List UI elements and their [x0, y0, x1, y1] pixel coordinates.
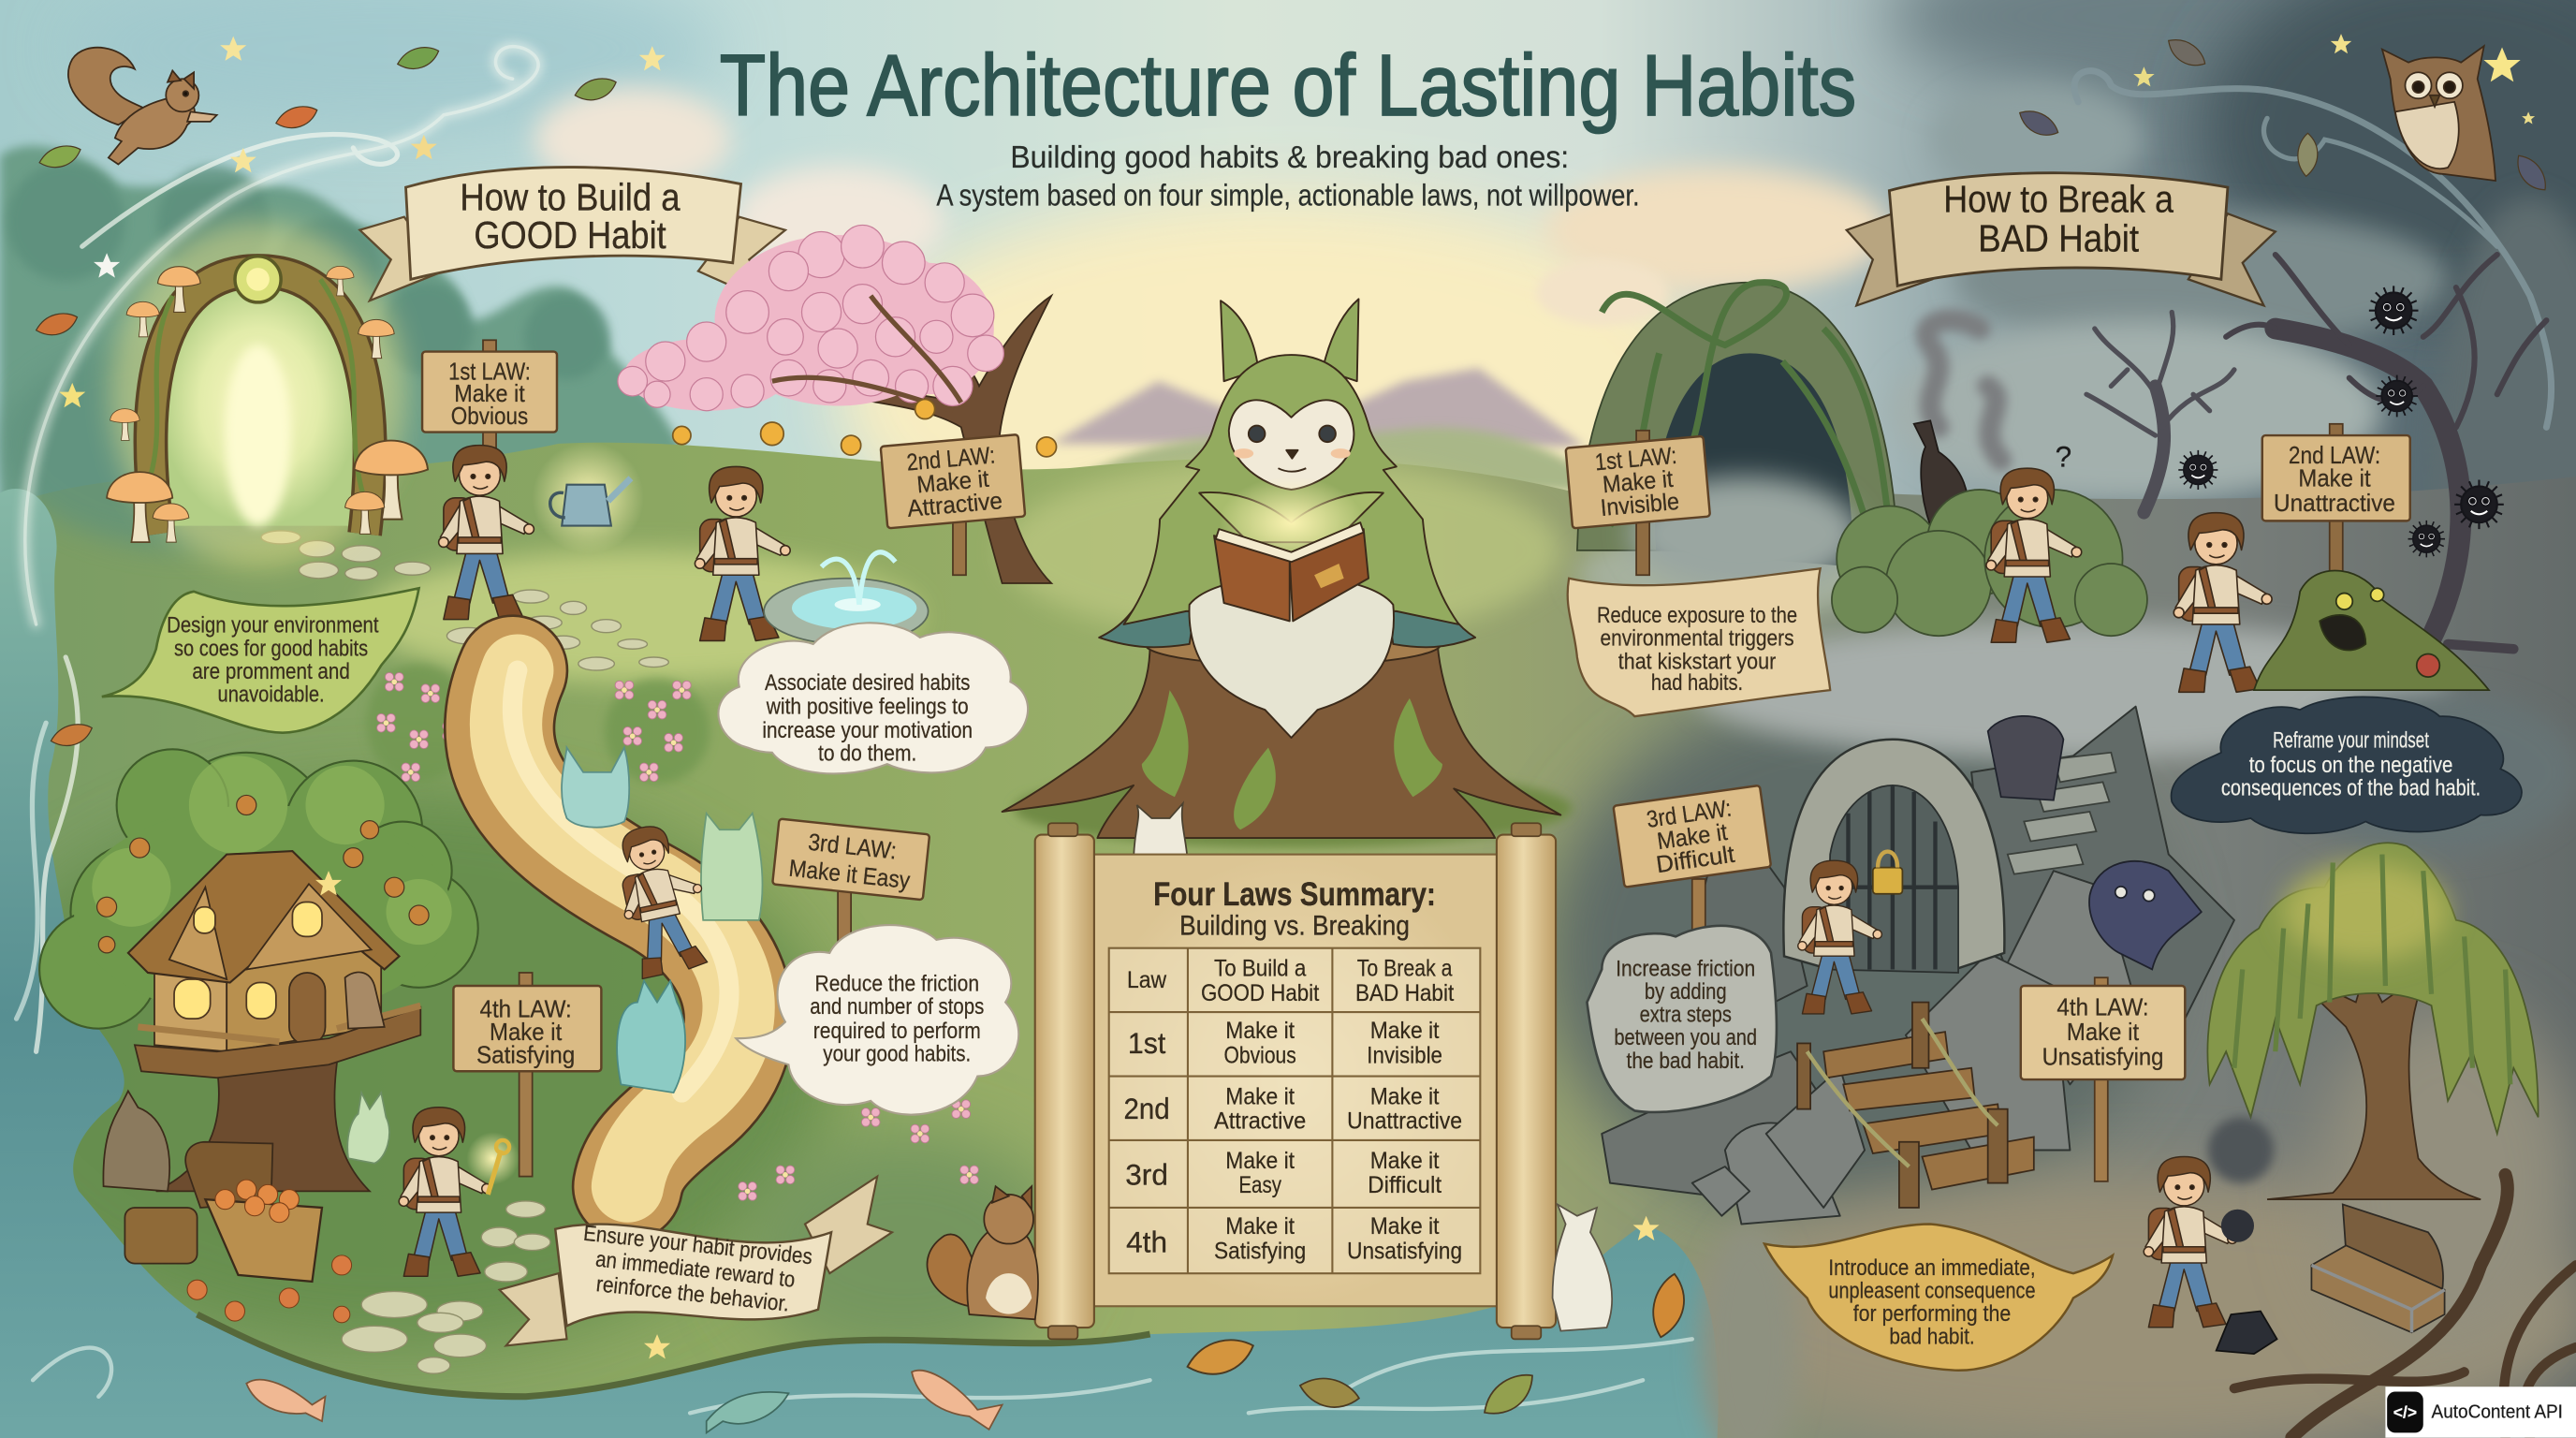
- summary table: Law: [1127, 968, 1166, 993]
- banner: how to break a bad habit: [1847, 173, 2276, 305]
- ribbon callout: ensure your habit: Ensure your habit provides: [582, 1222, 813, 1269]
- ribbon callout: ensure your habit: an immediate reward to: [594, 1248, 797, 1293]
- gold leaf callout: introduce a consequence: for performing the: [1853, 1302, 2011, 1327]
- summary table: 2nd: [1123, 1092, 1170, 1125]
- mushrooms: [107, 266, 428, 542]
- sign: 3rd law make it easy: [772, 819, 929, 961]
- leaf callout: design your environment: unavoidable.: [218, 682, 325, 707]
- summary table: Attractive: [1214, 1109, 1306, 1135]
- summary scroll: [1035, 803, 1556, 1339]
- forest guardian reading on stump: [1003, 299, 1573, 848]
- summary table: Make it: [1225, 1084, 1295, 1109]
- ribbon callout: ensure your habit: reinforce the behavior.: [595, 1272, 790, 1317]
- stone callout: increase friction: extra steps: [1640, 1004, 1732, 1028]
- sign: 2nd law make it attractive: Attractive: [906, 488, 1003, 522]
- sign: 2nd law make it attractive: [881, 434, 1025, 575]
- squirrel: top left: [68, 48, 217, 165]
- barred gate with padlock: [1783, 740, 2004, 973]
- parchment callout: reduce exposure: Reduce exposure to the: [1597, 604, 1797, 628]
- wind swirl: left: [25, 47, 538, 1051]
- summary table: Unsatisfying: [1347, 1239, 1462, 1264]
- leaf callout: design your environment: so coes for good habits: [174, 637, 368, 661]
- summary table: GOOD Habit: [1201, 981, 1319, 1006]
- summary table: Make it: [1370, 1214, 1440, 1240]
- boy with fountain: [695, 466, 790, 640]
- stairs going up: [2008, 753, 2116, 874]
- gold leaf callout: introduce a consequence: unpleasent consequence: [1828, 1279, 2036, 1303]
- summary table: Unattractive: [1347, 1109, 1462, 1135]
- empty chest: [2311, 1204, 2445, 1332]
- sign: 2nd law make it attractive: 2nd LAW:: [905, 442, 996, 477]
- slime monster: [2254, 570, 2489, 690]
- rocky hillside: [1602, 707, 2234, 1224]
- sign: 2nd law make it unattractive: [2262, 424, 2410, 575]
- shadow creatures: [1988, 716, 2202, 969]
- smoke and bottle in bush: [1832, 320, 2147, 636]
- open book: [1214, 522, 1368, 621]
- sign: 4th law make it satisfying: Satisfying: [476, 1043, 575, 1069]
- summary table: Easy: [1238, 1173, 1282, 1198]
- boy with question mark: ?: [2056, 439, 2071, 473]
- sign: 1st law make it obvious: 1st LAW:: [448, 359, 531, 385]
- night stars and leaves: top right: [2016, 30, 2548, 196]
- cloud callout: reduce the friction: Reduce the friction: [815, 972, 979, 996]
- sign: 4th law make it satisfying: 4th LAW:: [479, 996, 572, 1022]
- tree house: [39, 749, 478, 1191]
- wooden steps with rope: [1797, 1003, 2034, 1208]
- sign: 3rd law make it difficult: 3rd LAW:: [1645, 796, 1734, 833]
- forest spirits near slide: [562, 748, 763, 1093]
- sign: 3rd law make it difficult: [1613, 785, 1771, 935]
- cloud callout: reduce the friction: required to perform: [813, 1020, 981, 1044]
- white spirit by scroll: [1553, 1204, 1612, 1331]
- wind swirl: right: [2074, 71, 2552, 427]
- summary table: To Break a: [1357, 956, 1453, 981]
- sign: 1st law make it invisible: 1st LAW:: [1594, 443, 1678, 476]
- stone callout: increase friction: the bad habit.: [1627, 1049, 1745, 1074]
- parchment callout: reduce exposure: [1568, 568, 1830, 716]
- dark cloud callout: reframe your mindset: consequences of the bad habit.: [2221, 776, 2481, 800]
- blossom tree: [618, 225, 1051, 583]
- flower clusters: [366, 664, 1011, 1225]
- gold leaf callout: introduce a consequence: [1764, 1224, 2113, 1371]
- sign: 3rd law make it easy: Make it Easy: [787, 856, 912, 894]
- summary table: To Build a: [1214, 956, 1307, 981]
- tree stump: [1003, 623, 1573, 848]
- summary table: 4th: [1126, 1225, 1167, 1258]
- cloud callout: associate desired habits: [718, 623, 1028, 773]
- sign: 2nd law make it unattractive: 2nd LAW:: [2289, 443, 2380, 469]
- cloud callout: reduce the friction: your good habits.: [823, 1043, 971, 1067]
- hanging lanterns: [673, 399, 1057, 457]
- sign: 1st law make it obvious: [422, 340, 557, 448]
- boy with smoking coal: [2144, 1117, 2274, 1328]
- sign: 3rd law make it easy: 3rd LAW:: [807, 829, 898, 865]
- tangled roots: [2234, 1175, 2576, 1438]
- autocontent api badge: AutoContent API: [2432, 1402, 2563, 1423]
- portal: glowing archway: [110, 222, 406, 566]
- owl on branch: [2382, 46, 2496, 181]
- soot sprites: [2178, 286, 2504, 557]
- boy covering nose: [2174, 513, 2272, 692]
- gold leaf callout: introduce a consequence: bad habit.: [1889, 1326, 1975, 1350]
- summary table: Make it: [1225, 1214, 1295, 1240]
- cloud callout: associate desired habits: increase your motivation: [762, 719, 973, 743]
- banner: how to build a good habit: [359, 168, 785, 305]
- sign: 4th law make it unsatisfying: 4th LAW:: [2056, 995, 2149, 1021]
- banner: how to break a bad habit: BAD Habit: [1978, 217, 2139, 260]
- dark cloud callout: reframe your mindset: to focus on the negative: [2249, 754, 2452, 778]
- small white spirit on scroll: [1134, 803, 1188, 862]
- cloud callout: reduce the friction: [736, 925, 1018, 1115]
- subtitle: [936, 140, 1640, 212]
- autocontent api badge: </>: [2393, 1403, 2417, 1422]
- summary table: Make it: [1370, 1019, 1440, 1044]
- cloud callout: associate desired habits: to do them.: [818, 742, 916, 767]
- summary table: 1st: [1128, 1026, 1165, 1060]
- boy with watering can: [439, 442, 644, 620]
- ribbon callout: ensure your habit: [500, 1177, 892, 1345]
- leaf callout: design your environment: [102, 588, 419, 733]
- willow tree: [2207, 843, 2539, 1199]
- coal lump: [2217, 1312, 2277, 1354]
- large dead tree: [2226, 255, 2546, 649]
- sign: 1st law make it invisible: Make it: [1602, 466, 1675, 498]
- sign: 4th law make it satisfying: [453, 973, 601, 1177]
- sign: 2nd law make it attractive: Make it: [915, 466, 990, 498]
- summary table: Difficult: [1368, 1173, 1442, 1198]
- sign: 1st law make it invisible: Invisible: [1600, 489, 1680, 521]
- summary scroll: Building vs. Breaking: [1179, 911, 1410, 942]
- boy with golden key: [399, 1108, 520, 1276]
- fountain pool: [764, 552, 929, 644]
- animal by tree house: [103, 1091, 169, 1191]
- small dead tree: [2086, 312, 2234, 513]
- summary table: [1109, 948, 1480, 1273]
- cloud callout: associate desired habits: Associate desired habits: [765, 671, 970, 696]
- title: The Architecture of Lasting Habits: [720, 37, 1856, 134]
- small spirit by tree house: [347, 1093, 389, 1164]
- parchment callout: reduce exposure: had habits.: [1651, 671, 1743, 696]
- treasure chests with fruit: [124, 1142, 352, 1323]
- summary table: Obvious: [1224, 1044, 1296, 1069]
- subtitle: A system based on four simple, actionable laws, not willpower.: [936, 178, 1640, 212]
- banner: how to build a good habit: GOOD Habit: [474, 213, 666, 257]
- sign: 4th law make it unsatisfying: Make it: [2067, 1020, 2139, 1046]
- stone callout: increase friction: [1587, 926, 1777, 1112]
- autocontent api badge: [2385, 1387, 2576, 1438]
- boy on slide: [607, 818, 717, 979]
- summary table: Make it: [1370, 1084, 1440, 1109]
- banner: how to build a good habit: How to Build a: [460, 176, 681, 219]
- slide: [500, 670, 739, 1186]
- dark cloud callout: reframe your mindset: [2172, 697, 2522, 833]
- summary table: Make it: [1225, 1149, 1295, 1174]
- stone callout: increase friction: between you and: [1614, 1026, 1757, 1050]
- cloud callout: associate desired habits: with positive feelings to: [766, 696, 969, 720]
- sign: 1st law make it obvious: Obvious: [451, 404, 528, 430]
- river fish and leaves: [246, 871, 1698, 1432]
- banner: how to break a bad habit: How to Break a: [1943, 177, 2174, 220]
- dark cloud callout: reframe your mindset: Reframe your mindset: [2273, 729, 2429, 754]
- stone callout: increase friction: Increase friction: [1616, 957, 1755, 981]
- squirrel by scroll: [928, 1186, 1038, 1319]
- cloud callout: reduce the friction: and number of stops: [810, 995, 984, 1020]
- sign: 3rd law make it difficult: Difficult: [1655, 842, 1736, 878]
- summary table: Make it: [1225, 1019, 1295, 1044]
- parchment callout: reduce exposure: environmental triggers: [1600, 627, 1794, 652]
- sign: 4th law make it satisfying: Make it: [490, 1020, 562, 1046]
- stepping stone paths: good side: [261, 531, 668, 1373]
- sign: 1st law make it invisible: [1566, 431, 1710, 575]
- gold leaf callout: introduce a consequence: Introduce an immediate,: [1828, 1256, 2036, 1281]
- leaf callout: design your environment: are promment and: [192, 660, 350, 684]
- sign: 4th law make it unsatisfying: Unsatisfying: [2042, 1044, 2163, 1070]
- sign: 2nd law make it unattractive: Unattractive: [2274, 491, 2395, 517]
- summary table: Make it: [1370, 1149, 1440, 1174]
- summary table: Invisible: [1367, 1044, 1442, 1069]
- boy at the gate: [1798, 860, 1881, 1014]
- sign: 1st law make it obvious: Make it: [454, 381, 525, 407]
- overgrown cave: [1577, 283, 1897, 592]
- boy with question mark: [1986, 439, 2082, 642]
- parchment callout: reduce exposure: that kiskstart your: [1618, 650, 1776, 674]
- summary table: Satisfying: [1214, 1239, 1306, 1264]
- subtitle: Building good habits & breaking bad ones:: [1010, 140, 1569, 175]
- sign: 4th law make it unsatisfying: [2021, 977, 2185, 1181]
- summary table: BAD Habit: [1355, 981, 1454, 1006]
- sign: 2nd law make it unattractive: Make it: [2298, 465, 2371, 492]
- stone callout: increase friction: by adding: [1645, 980, 1727, 1005]
- stars and leaves: top left: [37, 37, 666, 745]
- sign: 3rd law make it difficult: Make it: [1656, 819, 1729, 855]
- summary table: 3rd: [1125, 1157, 1168, 1191]
- summary scroll: Four Laws Summary:: [1153, 876, 1436, 913]
- leaf callout: design your environment: Design your environment: [167, 614, 379, 638]
